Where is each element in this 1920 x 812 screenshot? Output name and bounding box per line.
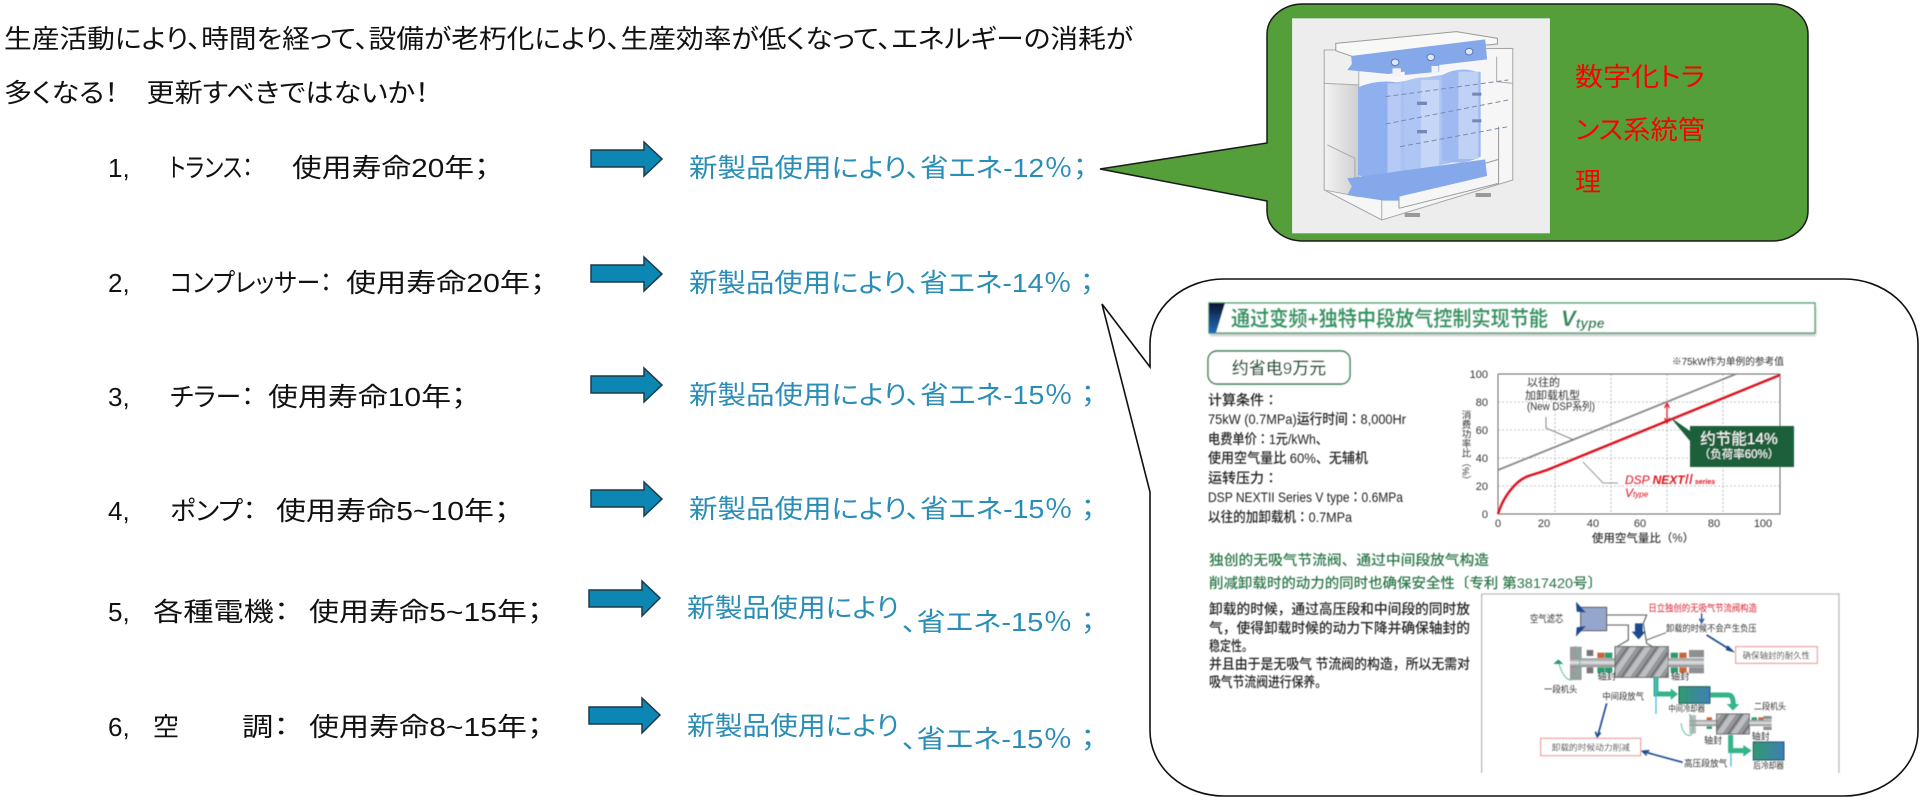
calculation conditions: DSP NEXTII Series V type：0.6MPa xyxy=(1208,489,1403,505)
row 2: compressor: 2, xyxy=(108,268,130,298)
red note: 日立独创的无吸气节流阀构造 xyxy=(1648,603,1757,615)
second stage rotor xyxy=(1681,714,1772,735)
savings callout: 约节能14% xyxy=(1700,430,1778,448)
row 2: compressor xyxy=(108,268,545,298)
first stage labels xyxy=(1544,670,1689,701)
arrow 6 xyxy=(589,698,660,733)
row 1: transformer xyxy=(108,153,489,183)
y axis labels: 0 xyxy=(1482,509,1488,521)
new model label: DSP NEXTII series xyxy=(1625,471,1715,488)
green speech bubble xyxy=(1100,4,1808,241)
line chart: power ratio vs air usage xyxy=(1460,355,1794,545)
x axis labels: 0 xyxy=(1495,518,1501,530)
row 1: transformer: 1, xyxy=(108,153,130,183)
power reduction note xyxy=(1541,738,1641,756)
x axis labels: 80 xyxy=(1708,518,1720,530)
row 2: compressor: コンプレッサー： xyxy=(170,268,332,298)
first stage labels: 中间段放气 xyxy=(1602,690,1644,701)
x axis labels: 100 xyxy=(1754,518,1772,530)
white speech bubble xyxy=(1102,279,1918,796)
row 6: air conditioning: 空 xyxy=(153,712,179,742)
section heading: 独创的无吸气节流阀、通过中间段放气构造 xyxy=(1209,552,1489,568)
cylinders xyxy=(1358,72,1481,175)
transformer illustration xyxy=(1292,18,1550,233)
saving gap arrow xyxy=(1664,403,1670,423)
saving 5: 、省エネ-15％ ； xyxy=(902,607,1095,637)
x axis labels: 20 xyxy=(1538,518,1550,530)
product sheet contents xyxy=(1208,303,1839,773)
calculation conditions: 电费单价：1元/kWh、 xyxy=(1208,431,1328,447)
section heading xyxy=(1209,552,1602,591)
red caption: ンス系統管 xyxy=(1575,115,1705,145)
x axis title: 使用空气量比（%） xyxy=(1592,531,1694,545)
saving 2: 新製品使用により、省エネ-14％ ； xyxy=(689,268,1094,298)
row 5: motors xyxy=(108,597,542,627)
conventional label: 加卸载机型 xyxy=(1525,388,1580,402)
air filter: 空气滤芯 xyxy=(1530,613,1563,626)
intercooler: 中间冷却器 xyxy=(1668,703,1705,714)
row 2: compressor: 使用寿命20年； xyxy=(346,268,545,298)
row 1: transformer: トランス： xyxy=(169,153,253,183)
description text: 稳定性。 xyxy=(1209,638,1253,654)
conventional line xyxy=(1498,374,1736,470)
savings badge xyxy=(1208,351,1350,384)
saving 5 xyxy=(687,593,1095,637)
row 6: air conditioning xyxy=(108,712,542,742)
calculation conditions: 计算条件： xyxy=(1208,392,1278,408)
intro text: 生産活動により、時間を経って、設備が老朽化により、生産効率が低くなって、エネルギーの消耗が xyxy=(4,24,1133,54)
compressor diagram: 卸载的时候不会产生负压 xyxy=(1666,623,1757,634)
saving 6: 、省エネ-15％ ； xyxy=(902,724,1095,754)
equipment list xyxy=(108,142,1095,754)
saving 3: 新製品使用により、省エネ-15％ ； xyxy=(689,380,1095,410)
row 3: chiller: 使用寿命10年； xyxy=(268,382,466,412)
arrow 2 xyxy=(591,257,662,291)
y axis labels: 40 xyxy=(1476,453,1488,465)
x axis labels: 60 xyxy=(1634,518,1646,530)
header banner: 通过变频+独特中段放气控制实现节能 xyxy=(1231,307,1548,331)
row 5: motors: 使用寿命5~15年； xyxy=(309,597,542,627)
intro text xyxy=(4,24,1133,108)
bottom clamp xyxy=(1347,159,1487,201)
saving 1: 新製品使用により、省エネ-12％； xyxy=(689,153,1087,183)
calculation conditions xyxy=(1208,392,1406,525)
header banner: type xyxy=(1576,315,1605,331)
row 3: chiller: 3, xyxy=(108,382,130,412)
first stage labels: 轴封 xyxy=(1671,670,1689,681)
row 4: pump: 使用寿命5~10年； xyxy=(276,496,509,526)
savings callout xyxy=(1670,417,1794,467)
saving 5: 新製品使用により xyxy=(687,593,899,623)
red caption xyxy=(1575,62,1705,197)
y axis labels: 100 xyxy=(1470,369,1488,381)
first stage rotor xyxy=(1553,646,1704,680)
durability note xyxy=(1736,647,1817,663)
second stage labels: 二段机头 xyxy=(1754,700,1786,711)
arrow 4 xyxy=(591,482,662,516)
new model label: Vtype xyxy=(1625,486,1649,500)
row 6: air conditioning: 6, xyxy=(108,712,130,742)
y axis title: 消费功率比（%） xyxy=(1460,409,1471,485)
row 4: pump: 4, xyxy=(108,496,130,526)
description text xyxy=(1209,601,1470,690)
row 3: chiller: チラー： xyxy=(170,382,254,412)
air filter xyxy=(1530,602,1607,637)
arrow 1 xyxy=(591,142,662,176)
row 6: air conditioning: 調： xyxy=(242,712,289,742)
conventional label: (New DSP系列) xyxy=(1527,400,1595,413)
power reduction note: 卸载的时候动力削减 xyxy=(1552,742,1630,753)
callout: compressor product sheet xyxy=(1102,279,1918,796)
second stage labels xyxy=(1704,700,1786,745)
description text: 并且由于是无吸气 节流阀的构造，所以无需对 xyxy=(1209,656,1470,672)
second stage labels: 轴封 xyxy=(1704,734,1722,745)
row 4: pump: ポンプ： xyxy=(170,496,256,526)
y axis labels: 20 xyxy=(1476,481,1488,493)
row 3: chiller xyxy=(108,382,466,412)
saving 6: 新製品使用により xyxy=(687,711,899,741)
x axis labels: 40 xyxy=(1587,518,1599,530)
calculation conditions: 以往的加卸载机：0.7MPa xyxy=(1208,509,1352,525)
compressor diagram xyxy=(1482,594,1839,773)
description text: 卸载的时候，通过高压段和中间段的同时放 xyxy=(1209,601,1470,617)
savings callout: （负荷率60%） xyxy=(1699,447,1779,461)
compressor diagram: 高压段放气 xyxy=(1684,758,1727,769)
arrow 5 xyxy=(589,581,660,616)
first stage labels: 一段机头 xyxy=(1544,684,1577,695)
saving 6 xyxy=(687,711,1095,754)
new model line xyxy=(1498,375,1780,514)
aftercooler: 后冷却器 xyxy=(1753,760,1784,771)
aftercooler xyxy=(1731,735,1784,771)
header banner: V xyxy=(1561,306,1576,331)
new model label xyxy=(1625,471,1715,500)
calculation conditions: 使用空气量比 60%、无辅机 xyxy=(1208,450,1368,466)
second stage labels: 轴封 xyxy=(1752,730,1770,741)
row 6: air conditioning: 使用寿命8~15年； xyxy=(309,712,542,742)
section heading: 削减卸载时的动力的同时也确保安全性〔专利 第3817420号〕 xyxy=(1209,575,1602,591)
savings badge: 约省电9万元 xyxy=(1232,359,1326,378)
first stage labels: 轴封 xyxy=(1597,670,1616,681)
conventional label xyxy=(1525,375,1595,413)
description text: 气，使得卸载时候的动力下降并确保轴封的 xyxy=(1209,620,1470,636)
row 5: motors: 各種電機： xyxy=(153,597,289,627)
durability note: 确保轴封的耐久性 xyxy=(1743,650,1810,660)
air pipes xyxy=(1607,615,1653,647)
arrow 3 xyxy=(591,368,662,402)
saving 4: 新製品使用により、省エネ-15％ ； xyxy=(689,494,1095,524)
y axis labels: 60 xyxy=(1476,425,1488,437)
header banner xyxy=(1209,303,1816,336)
red caption: 理 xyxy=(1575,167,1601,197)
callout: digital transformer xyxy=(1100,4,1808,241)
line chart: power ratio vs air usage: ※75kW作为单例的参考值 xyxy=(1672,355,1784,368)
row 4: pump xyxy=(108,496,509,526)
description text: 吸气节流阀进行保养。 xyxy=(1209,674,1327,690)
y axis labels xyxy=(1470,369,1488,521)
intro text: 多くなる！ 更新すべきではないか！ xyxy=(4,78,429,108)
y axis labels: 80 xyxy=(1476,397,1488,409)
calculation conditions: 运转压力： xyxy=(1208,470,1278,486)
row 1: transformer: 使用寿命20年； xyxy=(292,153,489,183)
conventional label: 以往的 xyxy=(1527,375,1560,389)
blue pointers xyxy=(1595,703,1683,762)
air flow pipes xyxy=(1656,677,1733,705)
calculation conditions: 75kW (0.7MPa)运行时间：8,000Hr xyxy=(1208,411,1406,427)
top clamp xyxy=(1347,39,1487,75)
intercooler xyxy=(1668,687,1710,714)
red caption: 数字化トラ xyxy=(1575,62,1705,92)
row 5: motors: 5, xyxy=(108,597,130,627)
x axis labels xyxy=(1495,518,1772,530)
